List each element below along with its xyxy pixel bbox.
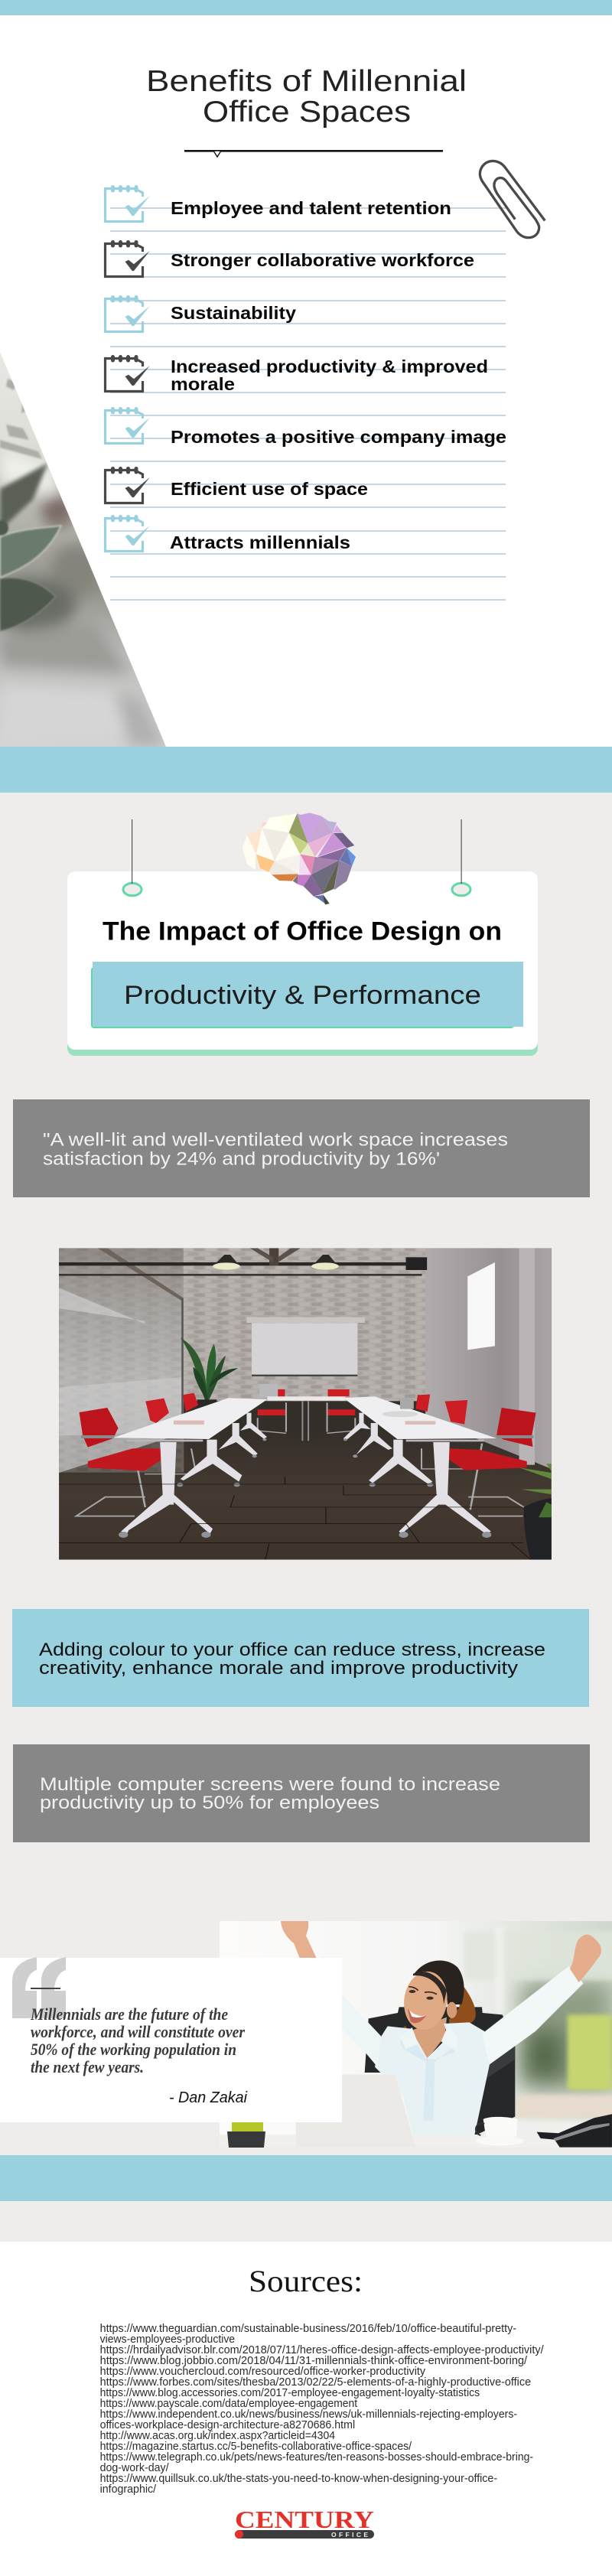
sources list: https://www.vouchercloud.com/resourced/office-worker-productivity [100,2365,426,2378]
notebook ruled lines [110,207,506,601]
quote text [30,2004,245,2076]
section background [0,793,612,2242]
plant photo wedge [0,352,168,747]
sources list: http://www.acas.org.uk/index.aspx?articleid=4304 [100,2429,335,2442]
subheading banner [91,962,523,1028]
sources list [100,2322,544,2496]
sources list: https://www.forbes.com/sites/thesba/2013/02/22/5-elements-of-a-highly-productive-office [100,2376,531,2389]
office meeting room photo [59,1248,552,1560]
woman celebrating photo [220,1921,612,2148]
icon: check 1 [106,185,150,222]
sign hook right [452,819,470,896]
icon: check 3 [106,295,150,332]
sources list: https://www.quillsuk.co.uk/the-stats-you-need-to-know-when-designing-your-office- [100,2472,497,2485]
benefit 3: Sustainability [171,303,296,323]
sources list: https://www.independent.co.uk/news/business/news/uk-millennials-rejecting-employers- [100,2408,517,2421]
subheading banner: Productivity & Performance [124,981,481,1010]
quote dash [31,1988,60,1989]
sources list: dog-work-day/ [100,2461,169,2474]
quote text: 50% of the working population in [31,2040,236,2059]
icon: check 5 [106,407,150,444]
lower band [0,2155,612,2201]
benefit 4: morale [171,374,235,394]
stat panel: ventilation: satisfaction by 24% and productivity by 16%' [43,1148,440,1169]
photo: raised fist and forearm [281,1921,317,1959]
icon: paperclip [480,161,545,238]
middle band [0,747,612,793]
heading: The Impact of Office Design on [103,917,502,946]
logo: Century Office: CENTURY [235,2506,374,2533]
title [146,65,467,129]
sources list: https://magazine.startus.cc/5-benefits-collaborative-office-spaces/ [100,2440,412,2453]
title: Benefits of Millennial [146,65,467,98]
stat panel: computer screens: productivity up to 50% for employees [40,1793,379,1813]
title: Office Spaces [203,96,411,129]
stat panel: ventilation: "A well-lit and well-ventilated work space increases [43,1129,508,1151]
quote text: Millennials are the future of the [30,2004,228,2024]
hanging sign card [67,819,538,1056]
icon: check 7 [106,515,150,551]
icon: check 4 [106,355,150,392]
title underline [184,150,443,157]
stat panel: computer screens: Multiple computer screens were found to increase [40,1774,500,1795]
benefit 2: Stronger collaborative workforce [171,250,474,270]
sources list: https://www.blog.jobbio.com/2018/04/11/31-millennials-think-office-environment-boring/ [100,2354,528,2367]
stat panel: computer screens [13,1744,590,1842]
benefit 4: Increased productivity & improved [171,357,488,376]
benefit 5: Promotes a positive company image [171,427,506,447]
top band [0,0,612,15]
sign hook left [123,819,142,896]
quote text: workforce, and will constitute over [31,2022,245,2041]
sources list: infographic/ [100,2483,157,2496]
benefit 6: Efficient use of space [171,479,368,499]
benefit 7: Attracts millennials [170,532,350,552]
sources heading: Sources: [249,2264,363,2298]
sources list: views-employees-productive [100,2333,235,2346]
quote text: the next few years. [31,2057,144,2076]
photo: desk plant [227,2122,265,2148]
quote card [0,1957,342,2122]
sources list: https://www.telegraph.co.uk/pets/news-features/ten-reasons-bosses-should-embrace-bring- [100,2451,533,2464]
logo: Century Office: OFFICE [331,2531,368,2539]
stat panel: colour: Adding colour to your office can reduce stress, increase [39,1640,545,1660]
sources list: https://www.blog.accessories.com/2017-employee-engagement-loyalty-statistics [100,2386,480,2399]
sources list: https://hrdailyadvisor.blr.com/2018/07/11/heres-office-design-affects-employee-productivity/ [100,2343,544,2356]
benefits checklist [106,185,506,552]
sources list: https://www.payscale.com/data/employee-engagement [100,2397,358,2410]
stat panel: ventilation [13,1099,590,1197]
icon: check 6 [106,467,150,503]
icon: quotation mark [12,1957,66,2018]
sources list: offices-workplace-design-architecture-a8270686.html [100,2418,355,2431]
quote author: - Dan Zakai [169,2089,248,2106]
benefit 4 [171,357,488,394]
benefit 1: Employee and talent retention [171,198,451,218]
sources list: https://www.theguardian.com/sustainable-business/2016/feb/10/office-beautiful-pretty- [100,2322,516,2335]
stat panel: colour: creativity, enhance morale and improve productivity [39,1658,518,1679]
icon: low-poly brain [243,813,356,904]
icon: check 2 [106,240,150,277]
stat panel: colour [12,1609,589,1707]
